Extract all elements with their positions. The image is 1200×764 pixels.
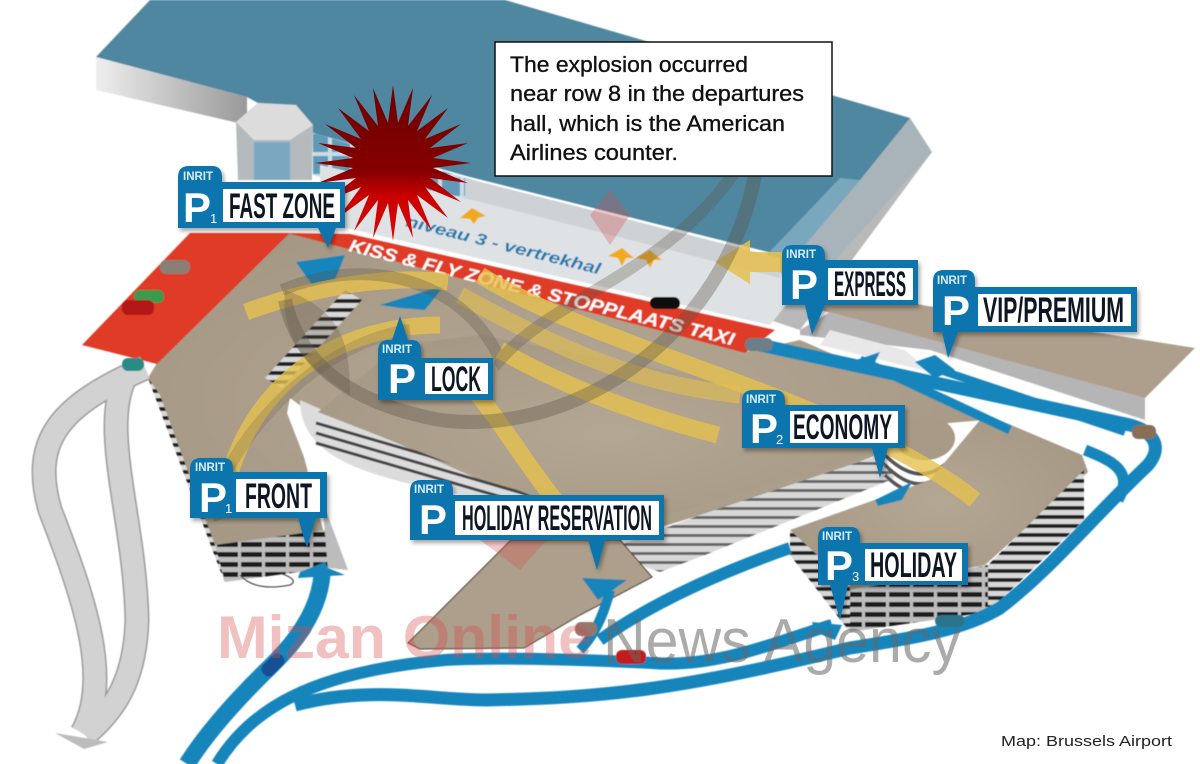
gray arrowhead — [55, 733, 108, 749]
label: vip premium: P — [942, 287, 970, 334]
label: holiday: HOLIDAY — [870, 546, 957, 585]
blue routes — [187, 345, 1155, 764]
label: holiday reservation — [410, 480, 664, 570]
explosion star — [315, 85, 471, 241]
label: fast zone: INRIT — [183, 171, 213, 183]
callout — [495, 42, 832, 176]
callout: Airlines counter. — [510, 140, 678, 165]
curved economy garage — [620, 416, 955, 572]
holiday reservation deck — [408, 540, 652, 649]
label: holiday: 3 — [852, 569, 859, 584]
label: front: P — [199, 474, 227, 521]
label: holiday: INRIT — [822, 531, 852, 543]
label: fast zone: FAST ZONE — [229, 187, 335, 226]
label: holiday reservation: INRIT — [414, 484, 444, 496]
label: express: P — [790, 261, 818, 308]
label: holiday reservation: P — [419, 496, 447, 543]
label: front — [190, 458, 327, 548]
source credit: Map: Brussels Airport — [1001, 733, 1173, 750]
label: express — [782, 245, 918, 335]
label: economy: INRIT — [746, 394, 776, 406]
terminal facade — [313, 133, 790, 325]
label: lock: INRIT — [382, 344, 412, 356]
label: front: INRIT — [195, 462, 225, 474]
yellow gate arrows — [460, 208, 662, 268]
red kiss and fly strip — [287, 233, 775, 353]
gray exit arrows — [44, 368, 145, 735]
holiday garage — [790, 414, 1088, 632]
label: economy: 2 — [776, 432, 783, 447]
label: fast zone: P — [183, 184, 211, 231]
label: front: FRONT — [245, 477, 312, 516]
label: lock: LOCK — [431, 360, 481, 399]
text: HOLIDAY RESERVATION — [462, 499, 652, 538]
cars — [122, 260, 1156, 679]
callout: hall, which is the American — [510, 111, 785, 136]
callout: The explosion occurred — [510, 52, 748, 77]
label: holiday — [818, 527, 968, 620]
front garage — [148, 378, 348, 587]
right tan strip and ramp — [800, 300, 1195, 420]
label: express: EXPRESS — [834, 265, 906, 304]
label: economy: P — [750, 405, 778, 452]
red kiss and fly strip: KISS & FLY ZONE & STOPPLAATS TAXI — [347, 235, 738, 350]
ramp stripes — [265, 290, 362, 388]
tan parking deck — [148, 233, 985, 570]
red roadway — [82, 233, 290, 364]
label: fast zone — [178, 166, 345, 248]
label: vip premium — [933, 270, 1137, 358]
departures level sign: niveau 3 - vertrekhal — [404, 213, 603, 278]
label: holiday: P — [825, 542, 853, 589]
watermark text: Mizan Online — [217, 604, 592, 671]
label: express: INRIT — [786, 249, 816, 261]
label: fast zone: 1 — [210, 211, 217, 226]
central garage — [300, 335, 900, 555]
label: economy: ECONOMY — [793, 408, 892, 447]
watermark text — [217, 604, 961, 676]
label: lock — [378, 316, 493, 402]
watermark text: News Agency — [603, 607, 961, 676]
label: economy — [742, 390, 905, 478]
tower — [236, 103, 313, 180]
label: vip premium: INRIT — [937, 275, 967, 287]
watermark: Mizan logo arcs — [210, 120, 975, 570]
blue direction arrowheads — [296, 255, 955, 640]
label: lock: P — [388, 355, 416, 402]
callout: near row 8 in the departures — [510, 81, 804, 106]
terminal roof — [96, 0, 932, 330]
label: front: 1 — [225, 501, 232, 516]
